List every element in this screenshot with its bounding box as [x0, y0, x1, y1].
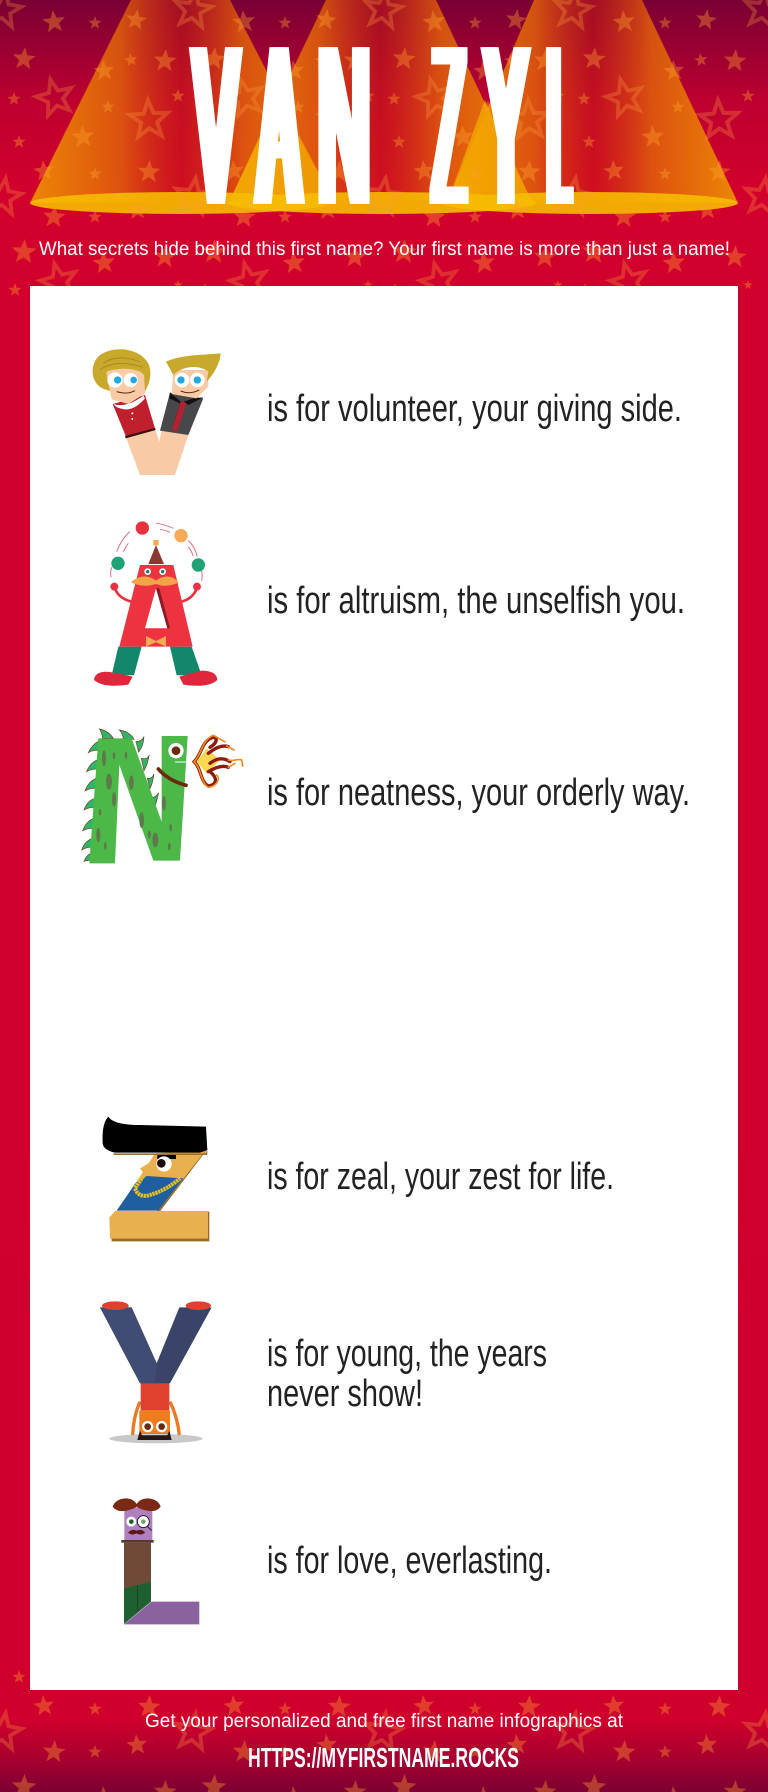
- subtitle: What secrets hide behind this first name? Your first name is more than just a name!: [39, 239, 730, 260]
- star pattern top: [0, 0, 768, 301]
- title: N: [318, 0, 370, 253]
- title: L: [549, 0, 569, 253]
- star pattern bottom: [0, 1670, 768, 1792]
- footer url: HTTPS://MYFIRSTNAME.ROCKS: [248, 1742, 519, 1773]
- icon: letter V finger puppets: [93, 349, 221, 475]
- icon: letter Z with pompadour: [103, 1117, 209, 1241]
- icon: letter N dragon: [82, 729, 243, 863]
- row Y: [100, 1301, 547, 1443]
- text: Y: is for young, the years: [267, 1333, 547, 1375]
- title: V: [194, 0, 237, 253]
- title: A: [259, 0, 299, 253]
- text: Y: [267, 1333, 547, 1415]
- row N: [82, 729, 690, 863]
- row Z: [103, 1117, 614, 1241]
- title: Y: [485, 0, 527, 253]
- icon: letter A juggling clown: [94, 521, 217, 686]
- row V: [93, 349, 682, 475]
- row A: [94, 521, 685, 686]
- text: Y: never show!: [267, 1373, 423, 1415]
- title: [188, 0, 574, 253]
- icon: letter Y handstand: [100, 1301, 212, 1443]
- white content panel: [30, 286, 738, 1690]
- footer invitation: Get your personalized and free first name infographics at: [145, 1711, 624, 1732]
- icon: fire breath: [194, 735, 243, 787]
- icon: letter L gentleman: [113, 1498, 199, 1624]
- title: Z: [434, 0, 464, 253]
- text: L: is for love, everlasting.: [267, 1540, 552, 1582]
- text: Z: is for zeal, your zest for life.: [267, 1156, 614, 1198]
- spotlights: [30, 0, 738, 214]
- row L: [113, 1498, 552, 1624]
